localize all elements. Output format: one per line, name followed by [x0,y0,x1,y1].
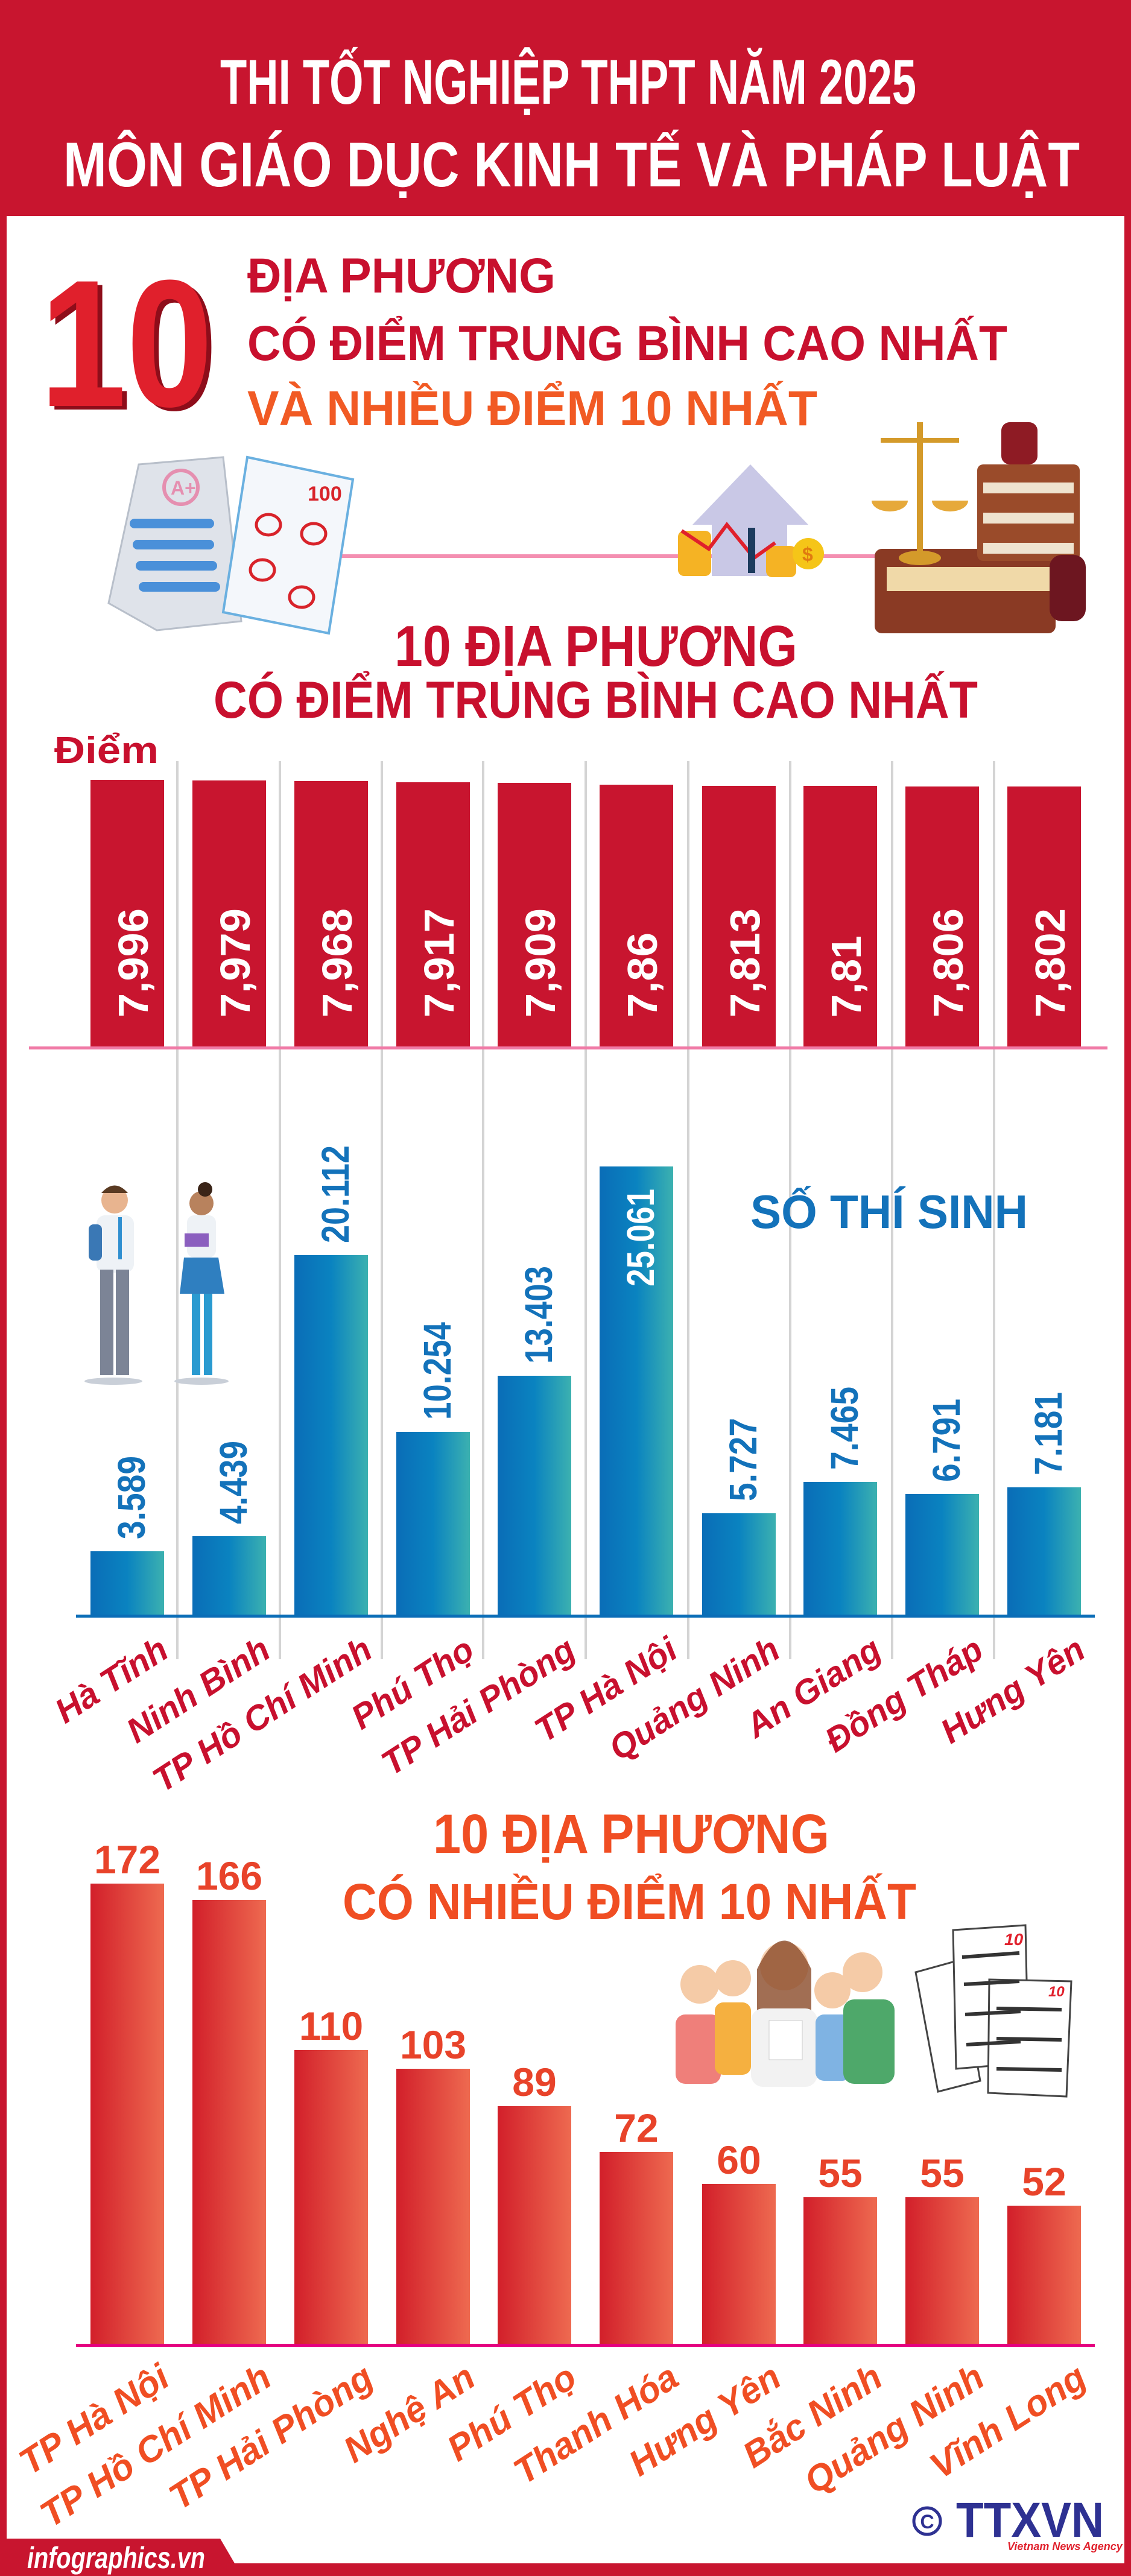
category labels: 10 scores chart: Quảng Ninh [797,2356,991,2502]
bar chart: average scores: 7,996 [110,908,157,1017]
category labels: candidates chart: TP Hà Nội [528,1630,685,1750]
bar chart: average scores: 7,917 [416,908,463,1017]
category labels: candidates chart [48,1630,1092,1800]
bar chart: number of 10 scores: 55 [920,2151,965,2195]
bar chart: candidates: 10.254 [416,1322,459,1420]
bar chart: number of 10 scores: 166 [196,1853,262,1898]
bar chart: candidates: 13.403 [517,1266,560,1364]
icon: students [84,1182,229,1385]
category labels: 10 scores chart [12,2356,1093,2535]
category labels: 10 scores chart: TP Hà Nội [12,2356,177,2483]
category labels: 10 scores chart: Nghệ An [337,2356,482,2470]
bar chart: number of 10 scores: 103 [400,2022,466,2067]
bar chart: candidates: 6.791 [925,1399,968,1482]
bar chart: number of 10 scores: 89 [512,2060,557,2104]
intro heading: VÀ NHIỀU ĐIỂM 10 NHẤT [247,381,817,436]
section heading: most perfect scores: 10 ĐỊA PHƯƠNG [433,1803,829,1865]
bar chart: number of 10 scores: 172 [94,1837,160,1882]
footer: infographics.vn: infographics.vn [27,2541,205,2575]
bar chart: number of 10 scores: 72 [614,2106,659,2150]
logo: TTXVN: TTXVN [956,2493,1104,2548]
bar chart: average scores: 7,86 [619,932,666,1017]
section heading: average score [214,614,978,729]
category labels: 10 scores chart: TP Hồ Chí Minh [33,2356,278,2535]
section heading: most perfect scores [343,1803,916,1930]
bar chart: number of 10 scores: 55 [818,2151,863,2195]
bar chart: number of 10 scores: 60 [717,2138,761,2182]
section heading: average score: CÓ ĐIỂM TRUNG BÌNH CAO NHẤT [214,671,978,729]
category labels: candidates chart: Hưng Yên [934,1630,1092,1751]
category labels: 10 scores chart: Vĩnh Long [923,2356,1093,2487]
category labels: 10 scores chart: Phú Thọ [440,2356,583,2469]
big number 10: 10 [45,245,218,448]
icon: teacher and students [676,1941,895,2087]
footer: infographics.vn [0,2539,1131,2576]
category labels: 10 scores chart: Bắc Ninh [735,2356,889,2476]
bar chart: number of 10 scores: 110 [299,2004,363,2048]
bar chart: candidates [76,1145,1095,1618]
bar chart: candidates: 20.112 [314,1145,357,1243]
category labels: candidates chart: Ninh Bình [120,1630,277,1750]
icon: scales and law books [872,422,1086,633]
category labels: candidates chart: An Giang [738,1630,888,1746]
icon: graded test papers: 10 [1004,1930,1024,1949]
category labels: candidates chart: TP Hải Phòng [375,1630,582,1783]
icon: graded test papers: 10 [1048,1984,1065,2000]
bar chart: candidates: 25.061 [619,1189,662,1286]
intro heading: ĐỊA PHƯƠNG [247,248,556,303]
category labels: 10 scores chart: Thanh Hóa [507,2356,685,2492]
bar chart: average scores: 7,813 [721,908,768,1017]
icon: house and coins [678,464,824,577]
divider line pink [335,554,878,558]
bar chart: average scores: 7,968 [314,908,361,1017]
bar chart: candidates: 3.589 [110,1456,153,1539]
bar chart: average scores: 7,806 [925,908,972,1017]
bar chart: number of 10 scores [76,1837,1095,2347]
icon: exam papers: A+ [171,477,196,499]
icon: exam papers [109,457,353,633]
bar chart: average scores: 7,81 [823,935,870,1017]
section heading: average score: 10 ĐỊA PHƯƠNG [394,614,797,679]
intro heading [247,248,1007,436]
bar chart: average scores [29,780,1107,1049]
icon: exam papers: 100 [308,483,342,505]
big number 10: 10 [40,242,213,445]
category labels: candidates chart: Hà Tĩnh [48,1630,175,1731]
title banner [0,0,1131,216]
section heading: most perfect scores: CÓ NHIỀU ĐIỂM 10 NHẤT [343,1873,916,1930]
legend: SỐ THÍ SINH: SỐ THÍ SINH [750,1185,1028,1238]
bar chart: number of 10 scores: 52 [1022,2159,1066,2204]
bar chart: candidates: 5.727 [721,1418,765,1501]
category labels: 10 scores chart: TP Hải Phòng [162,2356,380,2517]
intro heading: CÓ ĐIỂM TRUNG BÌNH CAO NHẤT [247,316,1007,371]
bar chart: candidates: 4.439 [212,1441,255,1524]
axis label Điểm: Điểm [54,730,159,771]
category labels: candidates chart: TP Hồ Chí Minh [146,1630,379,1800]
category labels: candidates chart: Đồng Tháp [819,1630,990,1760]
category labels: candidates chart: Quảng Ninh [602,1630,787,1768]
logo: TTXVN: Vietnam News Agency [1007,2540,1123,2552]
category labels: candidates chart: Phú Thọ [344,1630,481,1737]
bar chart: average scores: 7,979 [212,908,259,1017]
bar chart: candidates: 7.465 [823,1387,866,1470]
icon: graded test papers [916,1925,1071,2097]
bar chart: candidates: 7.181 [1027,1392,1070,1475]
bar chart: average scores: 7,802 [1027,908,1074,1017]
category labels: 10 scores chart: Hưng Yên [621,2356,788,2484]
logo: TTXVN: C [920,2511,934,2533]
bar chart: average scores: 7,909 [517,908,564,1017]
icon: house and coins: $ [802,543,813,565]
